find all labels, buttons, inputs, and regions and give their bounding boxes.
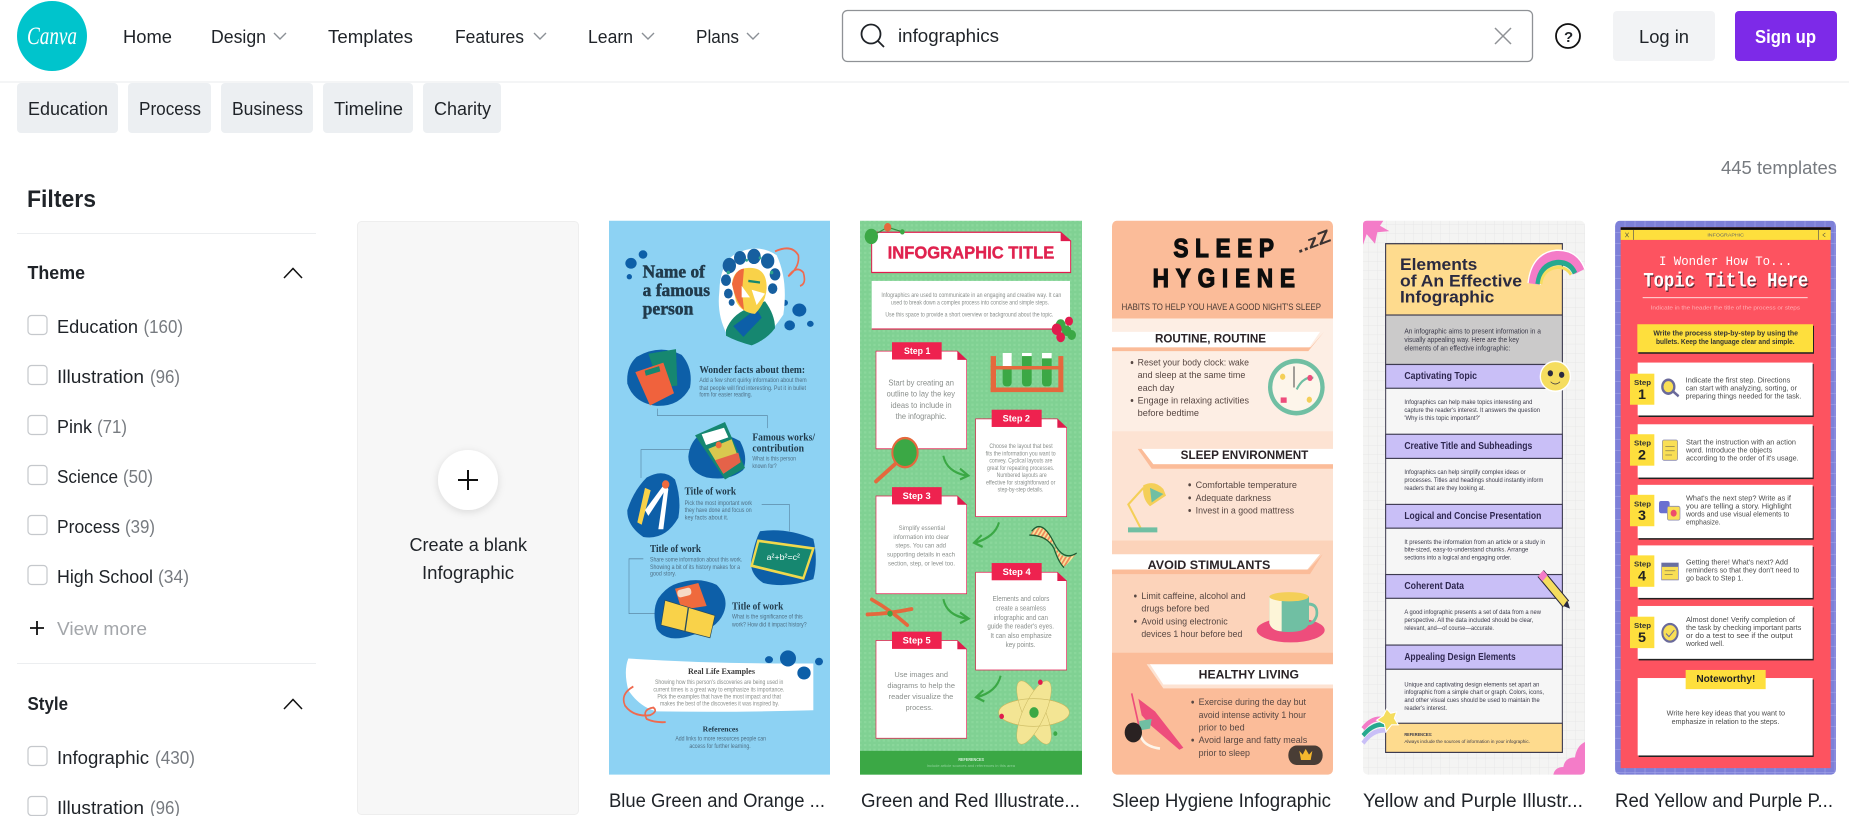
icon: chalkboard: a²+b²=c² — [767, 553, 800, 562]
filter group: theme: (96) — [150, 367, 180, 387]
title blobs — [625, 250, 814, 330]
text: famous works: contribution — [752, 444, 805, 455]
text: references footer: Include article sources and references in this area — [927, 764, 1015, 768]
callout: real life examples: Pick the examples that have the most impact and that — [657, 694, 781, 700]
icon: lamp — [1128, 483, 1166, 532]
panel: healthy living: Exercise during the day but — [1199, 697, 1306, 707]
icon: help: ? — [1564, 29, 1573, 46]
text block: intro: used to break down a complex process into concise and simple steps. — [891, 300, 1049, 307]
category pills: Education — [28, 99, 108, 119]
heading: name of a famous person: Name of — [643, 261, 706, 282]
panel: step 4: go back to Step 1. — [1686, 575, 1743, 583]
arrow: step 2 to step 3 — [974, 522, 999, 547]
icon: pencil — [1541, 573, 1570, 609]
icon: books — [627, 349, 691, 406]
section: captivating topic: Captivating Topic — [1404, 371, 1477, 381]
section: appealing design: reader's interest. — [1404, 706, 1447, 712]
panel: step 5: Use images and — [894, 670, 948, 679]
card title: blue: Blue Green and Orange ... — [609, 791, 825, 812]
navigation menu — [123, 27, 759, 47]
section: logical presentation — [1404, 510, 1545, 562]
filter group: style: Style — [28, 694, 68, 714]
icon: atom — [999, 676, 1069, 749]
text: title of work 1: Pick the most important work — [685, 501, 752, 507]
section: appealing design: and other visual cues should be used to maintain the — [1404, 698, 1540, 704]
panel: step 3: words and use visual elements to — [1685, 511, 1790, 519]
panel: routine: each day — [1138, 382, 1175, 393]
panel: step 4: Elements and colors — [993, 596, 1049, 603]
icon: dna — [1029, 527, 1077, 568]
icon: chromosome — [867, 599, 912, 625]
panel: routine — [1112, 332, 1324, 418]
panel: step 1 — [876, 342, 967, 449]
template card: blue famous person — [609, 221, 830, 775]
panel: step 5: worked well. — [1685, 641, 1724, 648]
icon: chalkboard — [751, 530, 816, 585]
section: coherent data — [1404, 581, 1542, 632]
panel: step 3 — [1630, 485, 1814, 540]
text: title of work 2: Share some information about this work. — [650, 557, 743, 564]
category pills: Business — [232, 99, 303, 119]
panel: step 3 — [876, 487, 967, 594]
text: title of work 1: Title of work — [685, 487, 737, 498]
panel: sleep environment: Invest in a good mattress — [1196, 505, 1295, 516]
text: famous works: Famous works/ — [752, 433, 815, 444]
panel: step 4: create a seamless — [996, 605, 1046, 613]
callout: real life examples: current times is a great way to emphasize its importance. — [653, 687, 785, 694]
text: wonder facts: form for easier reading. — [699, 392, 752, 399]
icon: zzz: ..zZ — [1294, 224, 1333, 257]
filter group: style — [28, 694, 302, 816]
panel: noteworthy: Noteworthy! — [1696, 674, 1755, 684]
panel: step 4: Step 4 — [1003, 566, 1031, 577]
panel: step 5: diagrams to help the — [887, 682, 955, 690]
callout: real life examples: Real Life Examples — [688, 667, 755, 676]
filter group: theme: Process — [57, 517, 120, 537]
panel: avoid stimulants: AVOID STIMULANTS — [1148, 559, 1270, 572]
panel: step 3: supporting details in each — [887, 552, 955, 559]
button: log in: Log in — [1639, 27, 1689, 47]
panel: step 4 — [976, 563, 1067, 670]
panel: healthy living: Avoid large and fatty meals — [1199, 735, 1308, 745]
panel: step 5 — [876, 632, 967, 738]
text: famous works: What is this person — [752, 456, 796, 463]
panel: step 2: Numbered layouts are — [997, 473, 1047, 479]
text: references: Always include the sources of information in your infographic. — [1404, 739, 1530, 744]
section: captivating topic: Infographics can help make topics interesting and — [1404, 400, 1532, 406]
panel: avoid stimulants: drugs before bed — [1141, 603, 1209, 614]
text: references: access for further learning. — [689, 744, 751, 750]
card title: red: Red Yellow and Purple P... — [1615, 791, 1833, 812]
arrow: step 4 to step 5 — [976, 676, 1001, 701]
text: famous works — [752, 433, 815, 470]
panel: sleep environment: SLEEP ENVIRONMENT — [1181, 449, 1309, 462]
logo: Canva — [17, 1, 87, 71]
section: creative title: readers that are they looking at. — [1404, 486, 1485, 492]
panel: step 2: Choose the layout that best — [989, 444, 1053, 450]
panel: step 5: Step — [1634, 622, 1652, 630]
text: references footer — [927, 757, 1015, 768]
text: title of work 1 — [685, 487, 752, 521]
filter group: theme: (71) — [97, 417, 127, 437]
window bar: INFOGRAPHIC — [1707, 232, 1744, 238]
filter group: theme: Education — [57, 317, 138, 337]
search box — [842, 10, 1532, 62]
icon: notebooks — [655, 580, 726, 638]
panel: avoid stimulants: devices 1 hour before bed — [1141, 628, 1242, 639]
panel: create blank card: Create a blank — [410, 535, 528, 555]
section: appealing design — [1404, 651, 1544, 712]
template card: yellow and purple elements — [1363, 221, 1585, 775]
text: references — [675, 726, 766, 750]
heading: sleep hygiene — [1122, 235, 1321, 312]
panel: step 4: Step — [1634, 560, 1652, 569]
filter group: theme: View more — [57, 619, 147, 639]
panel: healthy living: prior to bed — [1199, 722, 1245, 733]
panel: step 1: Indicate the first step. Directions — [1686, 377, 1791, 385]
panel: sleep environment — [1138, 449, 1333, 516]
icon: test tube rack — [991, 353, 1063, 392]
template card: green and red steps — [860, 221, 1082, 775]
panel: avoid stimulants: Avoid using electronic — [1141, 616, 1228, 626]
section: appealing design: infographic from a simple chart or graph. Colors, icons, — [1404, 690, 1544, 696]
heading: topic title — [1643, 254, 1809, 312]
panel: healthy living — [1147, 664, 1333, 758]
icon: help — [1556, 24, 1580, 48]
icon: compass — [627, 473, 679, 538]
panel: step 2: fits the information you want to — [986, 451, 1056, 457]
icon: crown badge — [1288, 745, 1323, 765]
icon: pink cloud — [1553, 742, 1585, 775]
panel: noteworthy — [1638, 670, 1814, 757]
panel: noteworthy: emphasize in relation to the steps. — [1672, 719, 1779, 726]
panel: step 1 — [1630, 363, 1814, 417]
text block: intro — [872, 281, 1070, 330]
panel: step 3: section, step, or level too. — [888, 561, 955, 567]
text: title of work 3: What is the significance of this — [732, 614, 803, 621]
category pills — [17, 83, 501, 133]
panel: step 5: Step 5 — [903, 635, 931, 646]
heading: elements of an effective infographic: of An Effective — [1400, 272, 1522, 291]
text: intro: visually appealing way. Here are the key — [1404, 337, 1520, 344]
panel: step 5: or do a test to see if the output — [1686, 633, 1793, 640]
filter group: theme: High School — [57, 567, 153, 587]
button: sign up — [1735, 11, 1837, 61]
panel: step 5: the task by checking important parts — [1686, 625, 1802, 632]
text: intro — [1404, 328, 1541, 353]
panel: step 1: Start by creating an — [888, 378, 954, 388]
panel: routine: ROUTINE, ROUTINE — [1155, 333, 1266, 346]
panel: noteworthy: Write here key ideas that you want to — [1667, 710, 1785, 718]
filter group: theme: (39) — [125, 517, 155, 537]
callout: real life examples: Showing how this person's discoveries are being used in — [655, 680, 783, 686]
panel: step 1: preparing things needed for the task. — [1686, 393, 1801, 401]
filter group: theme — [28, 263, 302, 639]
panel: step 4: infographic and can — [994, 614, 1048, 622]
section: coherent data: Coherent Data — [1404, 581, 1465, 591]
text: famous works: known for? — [752, 464, 777, 470]
navigation menu: Learn — [588, 27, 633, 47]
heading: elements of an effective infographic: Infographic — [1400, 289, 1495, 307]
heading: name of a famous person — [643, 261, 711, 319]
panel: step 3: Step 3 — [903, 490, 931, 501]
panel: step 4: guide the reader's eyes. — [987, 623, 1054, 631]
panel: healthy living: HEALTHY LIVING — [1199, 669, 1299, 682]
icon: yoga figure — [1125, 693, 1183, 750]
heading: elements of an effective infographic — [1400, 256, 1522, 307]
text block: intro: Infographics are used to communicate in an engaging and creative way. It can — [881, 293, 1061, 299]
text: intro: elements of an effective infographic: — [1404, 345, 1511, 353]
text: title of work 3 — [731, 602, 807, 628]
text: title of work 2: Showing a bit of its history makes for a — [650, 565, 741, 571]
section: appealing design: Unique and captivating design elements set apart an — [1404, 682, 1539, 689]
heading: sleep hygiene: HABITS TO HELP YOU HAVE A GOOD NIGHT'S SLEEP — [1122, 303, 1321, 312]
text: wonder facts: Wonder facts about them: — [699, 365, 805, 376]
panel: step 3: Step — [1634, 500, 1652, 508]
panel: routine: before bedtime — [1138, 408, 1199, 418]
section: captivating topic: capture the reader's interest. It answers the question — [1404, 408, 1540, 414]
text: title of work 2 — [650, 544, 743, 578]
text: references: REFERENCES: — [1404, 732, 1432, 737]
panel: step 2: great for repeating processes. — [987, 466, 1055, 472]
filter group: theme: Pink — [57, 417, 93, 437]
section: logical presentation: bite-sized, easy-to-understand chunks. Arrange — [1404, 547, 1528, 554]
panel: step 1: Step 1 — [904, 346, 931, 356]
filter group: theme: (34) — [158, 567, 189, 587]
text: references footer: REFERENCES — [958, 757, 984, 762]
card title: sleep: Sleep Hygiene Infographic — [1112, 791, 1331, 812]
panel: step 1: ideas to include in — [891, 400, 952, 410]
panel: avoid stimulants — [1112, 554, 1323, 639]
panel: healthy living: prior to sleep — [1199, 747, 1250, 758]
callout: instructions — [1637, 324, 1814, 354]
panel: step 1: Step — [1634, 379, 1652, 387]
panel: step 1: 1 — [1638, 386, 1646, 402]
panel: step 3: emphasize. — [1686, 519, 1721, 527]
filter group: theme: Science — [57, 467, 118, 487]
icon: pink star — [1363, 221, 1389, 245]
section: logical presentation: sections into a logical and engaging order. — [1404, 555, 1512, 562]
icon: smiley — [1540, 361, 1570, 391]
heading: name of a famous person: a famous — [643, 280, 711, 300]
text: title of work 1: key facts about it. — [685, 515, 729, 521]
heading: topic title: Topic Title Here — [1644, 271, 1809, 294]
icon: cell cluster — [1052, 317, 1076, 342]
section: creative title: processes. Titles and headings should instantly inform — [1404, 478, 1544, 484]
section: coherent data: A good infographic presents a set of data from a new — [1404, 610, 1542, 616]
callout: real life examples: makes the best of the discoveries it was inspired by. — [660, 701, 779, 708]
icon: rainbow — [1534, 257, 1579, 284]
icon: cup — [1257, 592, 1325, 642]
panel: step 3: Simplify essential — [899, 526, 945, 532]
panel: step 3: you are telling a story. Highlight — [1686, 503, 1791, 511]
callout: instructions: Write the process step-by-step by using the — [1653, 330, 1798, 338]
filter group: theme: Theme — [28, 263, 85, 283]
column sections — [1386, 244, 1562, 752]
section: creative title: Creative Title and Subheadings — [1404, 441, 1532, 451]
section: creative title: Infographics can help simplify complex ideas or — [1404, 470, 1526, 476]
arrow: step 3 to step 4 — [943, 599, 969, 623]
icon: molecule — [865, 223, 905, 244]
section: captivating topic: 'Why is this topic important?' — [1404, 416, 1480, 422]
section: creative title — [1404, 441, 1544, 492]
callout: real life examples — [626, 658, 813, 712]
button: sign up: Sign up — [1755, 27, 1816, 47]
header bar — [0, 0, 1849, 83]
panel: avoid stimulants: Limit caffeine, alcohol and — [1141, 591, 1246, 601]
sleep hygiene sections backgrounds — [1112, 318, 1333, 432]
panel: step 2: word. Introduce the objects — [1685, 447, 1773, 454]
connector lines — [629, 409, 789, 614]
heading: sleep hygiene: HYGIENE — [1153, 265, 1295, 293]
panel: create blank card: Infographic — [422, 563, 514, 583]
panel: step 2: convey. Cyclical layouts are — [989, 458, 1052, 465]
text: references: References — [703, 726, 739, 733]
panel: step 5 — [1630, 606, 1814, 660]
category pills: Timeline — [334, 99, 403, 119]
panel: step 5: Almost done! Verify completion of — [1686, 617, 1795, 624]
card title: yellow: Yellow and Purple Illustr... — [1363, 791, 1583, 812]
panel: step 4: It can also emphasize — [990, 632, 1052, 640]
panel: step 2: Step — [1634, 439, 1652, 448]
panel: step 2: step-by-step details. — [998, 487, 1044, 494]
callout: instructions: bullets. Keep the language clear and simple. — [1656, 339, 1795, 346]
heading: filters: Filters — [27, 186, 96, 213]
text block: intro: Use this space to provide a short overview or background about the topic. — [885, 312, 1054, 319]
panel: step 2 — [1630, 424, 1814, 479]
card title: green: Green and Red Illustrate... — [861, 791, 1080, 812]
section: logical presentation: It presents the information from an article or a study in — [1404, 540, 1545, 546]
heading: topic title: Topic Title Here — [1643, 270, 1808, 293]
panel: step 1: the infographic. — [896, 411, 947, 421]
icon: clock — [1268, 359, 1325, 415]
text: wonder facts — [699, 365, 807, 399]
panel: sleep environment: Adequate darkness — [1196, 492, 1271, 503]
text: title of work 2: good story. — [650, 571, 676, 578]
icon: calculator — [688, 422, 745, 479]
text: title of work 3: Title of work — [732, 602, 784, 613]
panel: step 4 — [1630, 545, 1814, 599]
panel: step 2: 2 — [1638, 447, 1646, 463]
text: wonder facts: Add a few short quirky information about them — [699, 378, 807, 384]
navigation menu: Home — [123, 27, 172, 47]
template count: 445 templates — [1721, 158, 1837, 178]
navigation menu: Plans — [696, 27, 739, 47]
panel: filters sidebar — [17, 186, 316, 816]
panel: step 5: process. — [906, 704, 933, 712]
panel: step 1: outline to lay the key — [887, 389, 955, 399]
panel: routine: and sleep at the same time — [1138, 369, 1245, 380]
heading: infographic title: INFOGRAPHIC TITLE — [888, 242, 1054, 263]
text: intro: An infographic aims to present information in a — [1404, 328, 1541, 336]
text: title of work 2: Title of work — [650, 544, 702, 555]
heading: topic title: I Wonder How To... — [1659, 254, 1792, 269]
section: appealing design: Appealing Design Elements — [1404, 651, 1516, 662]
section: captivating topic — [1404, 371, 1540, 422]
panel: create blank card — [358, 222, 578, 814]
heading: infographic title — [872, 232, 1071, 272]
template card: red steps — [1615, 221, 1836, 775]
icon: magnifying glass — [876, 438, 918, 481]
panel: healthy living: avoid intense activity 1 hour — [1199, 709, 1306, 720]
navigation menu: Templates — [328, 27, 413, 47]
footer band — [860, 751, 1082, 775]
text: title of work 1: they have done and focus on — [685, 508, 752, 514]
search box: infographics — [898, 26, 999, 46]
text: references — [1404, 732, 1530, 744]
panel: sleep environment: Comfortable temperature — [1196, 479, 1297, 490]
heading: name of a famous person: person — [643, 299, 693, 319]
panel: step 4: reminders so that they don't need to — [1686, 567, 1800, 575]
panel: step 3: 3 — [1638, 507, 1646, 523]
panel: step 4: key points. — [1006, 642, 1036, 649]
panel: step 1: can start with analyzing, sorting, or — [1686, 385, 1798, 393]
section: coherent data: perspective. All the data included should be clear, — [1404, 618, 1534, 624]
panel: step 2: Step 2 — [1003, 413, 1030, 424]
text: wonder facts: that people will find interesting. Put it in bullet — [699, 386, 806, 392]
navigation menu: Features — [455, 27, 524, 47]
panel: step 2: according to the order of it's usage. — [1686, 455, 1799, 462]
text: title of work 3: work? How did it impact history? — [731, 622, 807, 628]
panel: step 2: effective for straightforward or — [986, 480, 1055, 487]
filter group: theme: (50) — [123, 467, 153, 487]
text: references: Add links to more resources people can — [675, 736, 766, 743]
panel: step 4: 4 — [1638, 568, 1647, 584]
icon: portrait — [719, 249, 785, 345]
heading: sleep hygiene: SLEEP — [1173, 235, 1274, 264]
logo: Canva: Canva — [27, 23, 77, 50]
panel: routine: Reset your body clock: wake — [1138, 357, 1249, 368]
category pills: Charity — [434, 99, 491, 119]
heading: elements of an effective infographic: Elements — [1400, 256, 1478, 274]
panel: step 2 — [976, 410, 1067, 517]
panel: step 2: Start the instruction with an action — [1686, 439, 1796, 447]
panel: step 5: reader visualize the — [889, 693, 953, 701]
arrow: step 1 to step 2 — [943, 456, 968, 479]
section: logical presentation: Logical and Concise Presentation — [1404, 510, 1542, 521]
icon: star with rainbow — [1363, 709, 1398, 743]
filter group: theme: Illustration — [57, 367, 144, 387]
filter group: style: Infographic — [57, 748, 149, 768]
panel: step 5: 5 — [1638, 629, 1646, 645]
panel: step 3: What's the next step? Write as if — [1686, 495, 1791, 503]
panel: step 3: steps. You can add — [895, 543, 946, 550]
button: log in — [1613, 11, 1715, 61]
panel: routine: Engage in relaxing activities — [1138, 395, 1250, 406]
category pills: Process — [139, 99, 201, 119]
heading: topic title: Indicate in the header the title of the process or steps — [1651, 305, 1800, 312]
navigation menu: Design — [211, 27, 266, 47]
panel: step 4: Getting there! What's next? Add — [1686, 559, 1788, 567]
panel: step 3: information into clear — [893, 535, 949, 541]
section: coherent data: relevant, and—of course—accurate. — [1404, 626, 1494, 632]
filter group: theme: (160) — [144, 317, 183, 337]
filter group: style: (430) — [155, 748, 195, 768]
window bar — [1621, 230, 1831, 240]
template card: sleep hygiene — [1112, 221, 1333, 775]
